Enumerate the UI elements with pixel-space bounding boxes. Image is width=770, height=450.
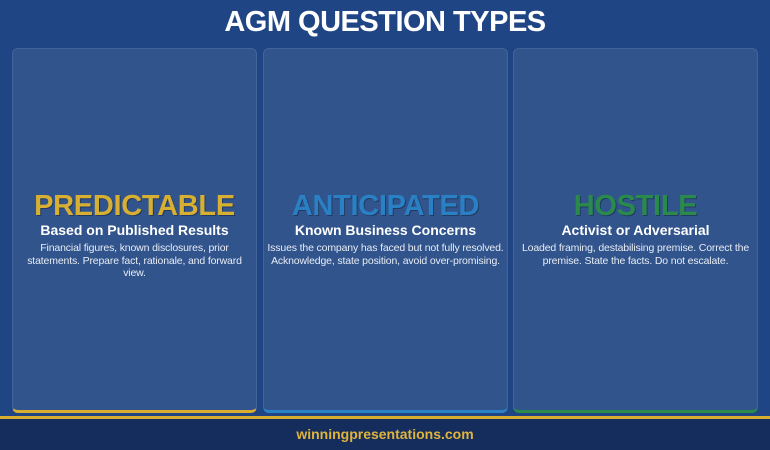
title: AGM QUESTION TYPES (224, 6, 546, 38)
heading: hostile: HOSTILE (574, 190, 697, 222)
body text: Acknowledge, state position, avoid over-promising. (271, 254, 500, 266)
subtitle: Activist or Adversarial (561, 222, 710, 238)
subtitle: Known Business Concerns (295, 222, 476, 238)
panel: anticipated (263, 48, 508, 413)
heading: predictable: PREDICTABLE (34, 190, 235, 222)
body text: Issues the company has faced but not fully resolved. (267, 242, 504, 254)
footer: winningpresentations.com (296, 426, 474, 442)
panel: hostile (513, 48, 758, 413)
panel: predictable (12, 48, 257, 413)
footer (0, 419, 770, 450)
body text: Loaded framing, destabilising premise. Correct the premise. State the facts. Do not escalate. (522, 242, 749, 266)
heading: anticipated: ANTICIPATED (292, 190, 479, 222)
body text: Financial figures, known disclosures, prior statements. Prepare fact, rationale, and forward view. (27, 242, 242, 279)
subtitle: Based on Published Results (40, 222, 229, 238)
body text (267, 242, 504, 266)
